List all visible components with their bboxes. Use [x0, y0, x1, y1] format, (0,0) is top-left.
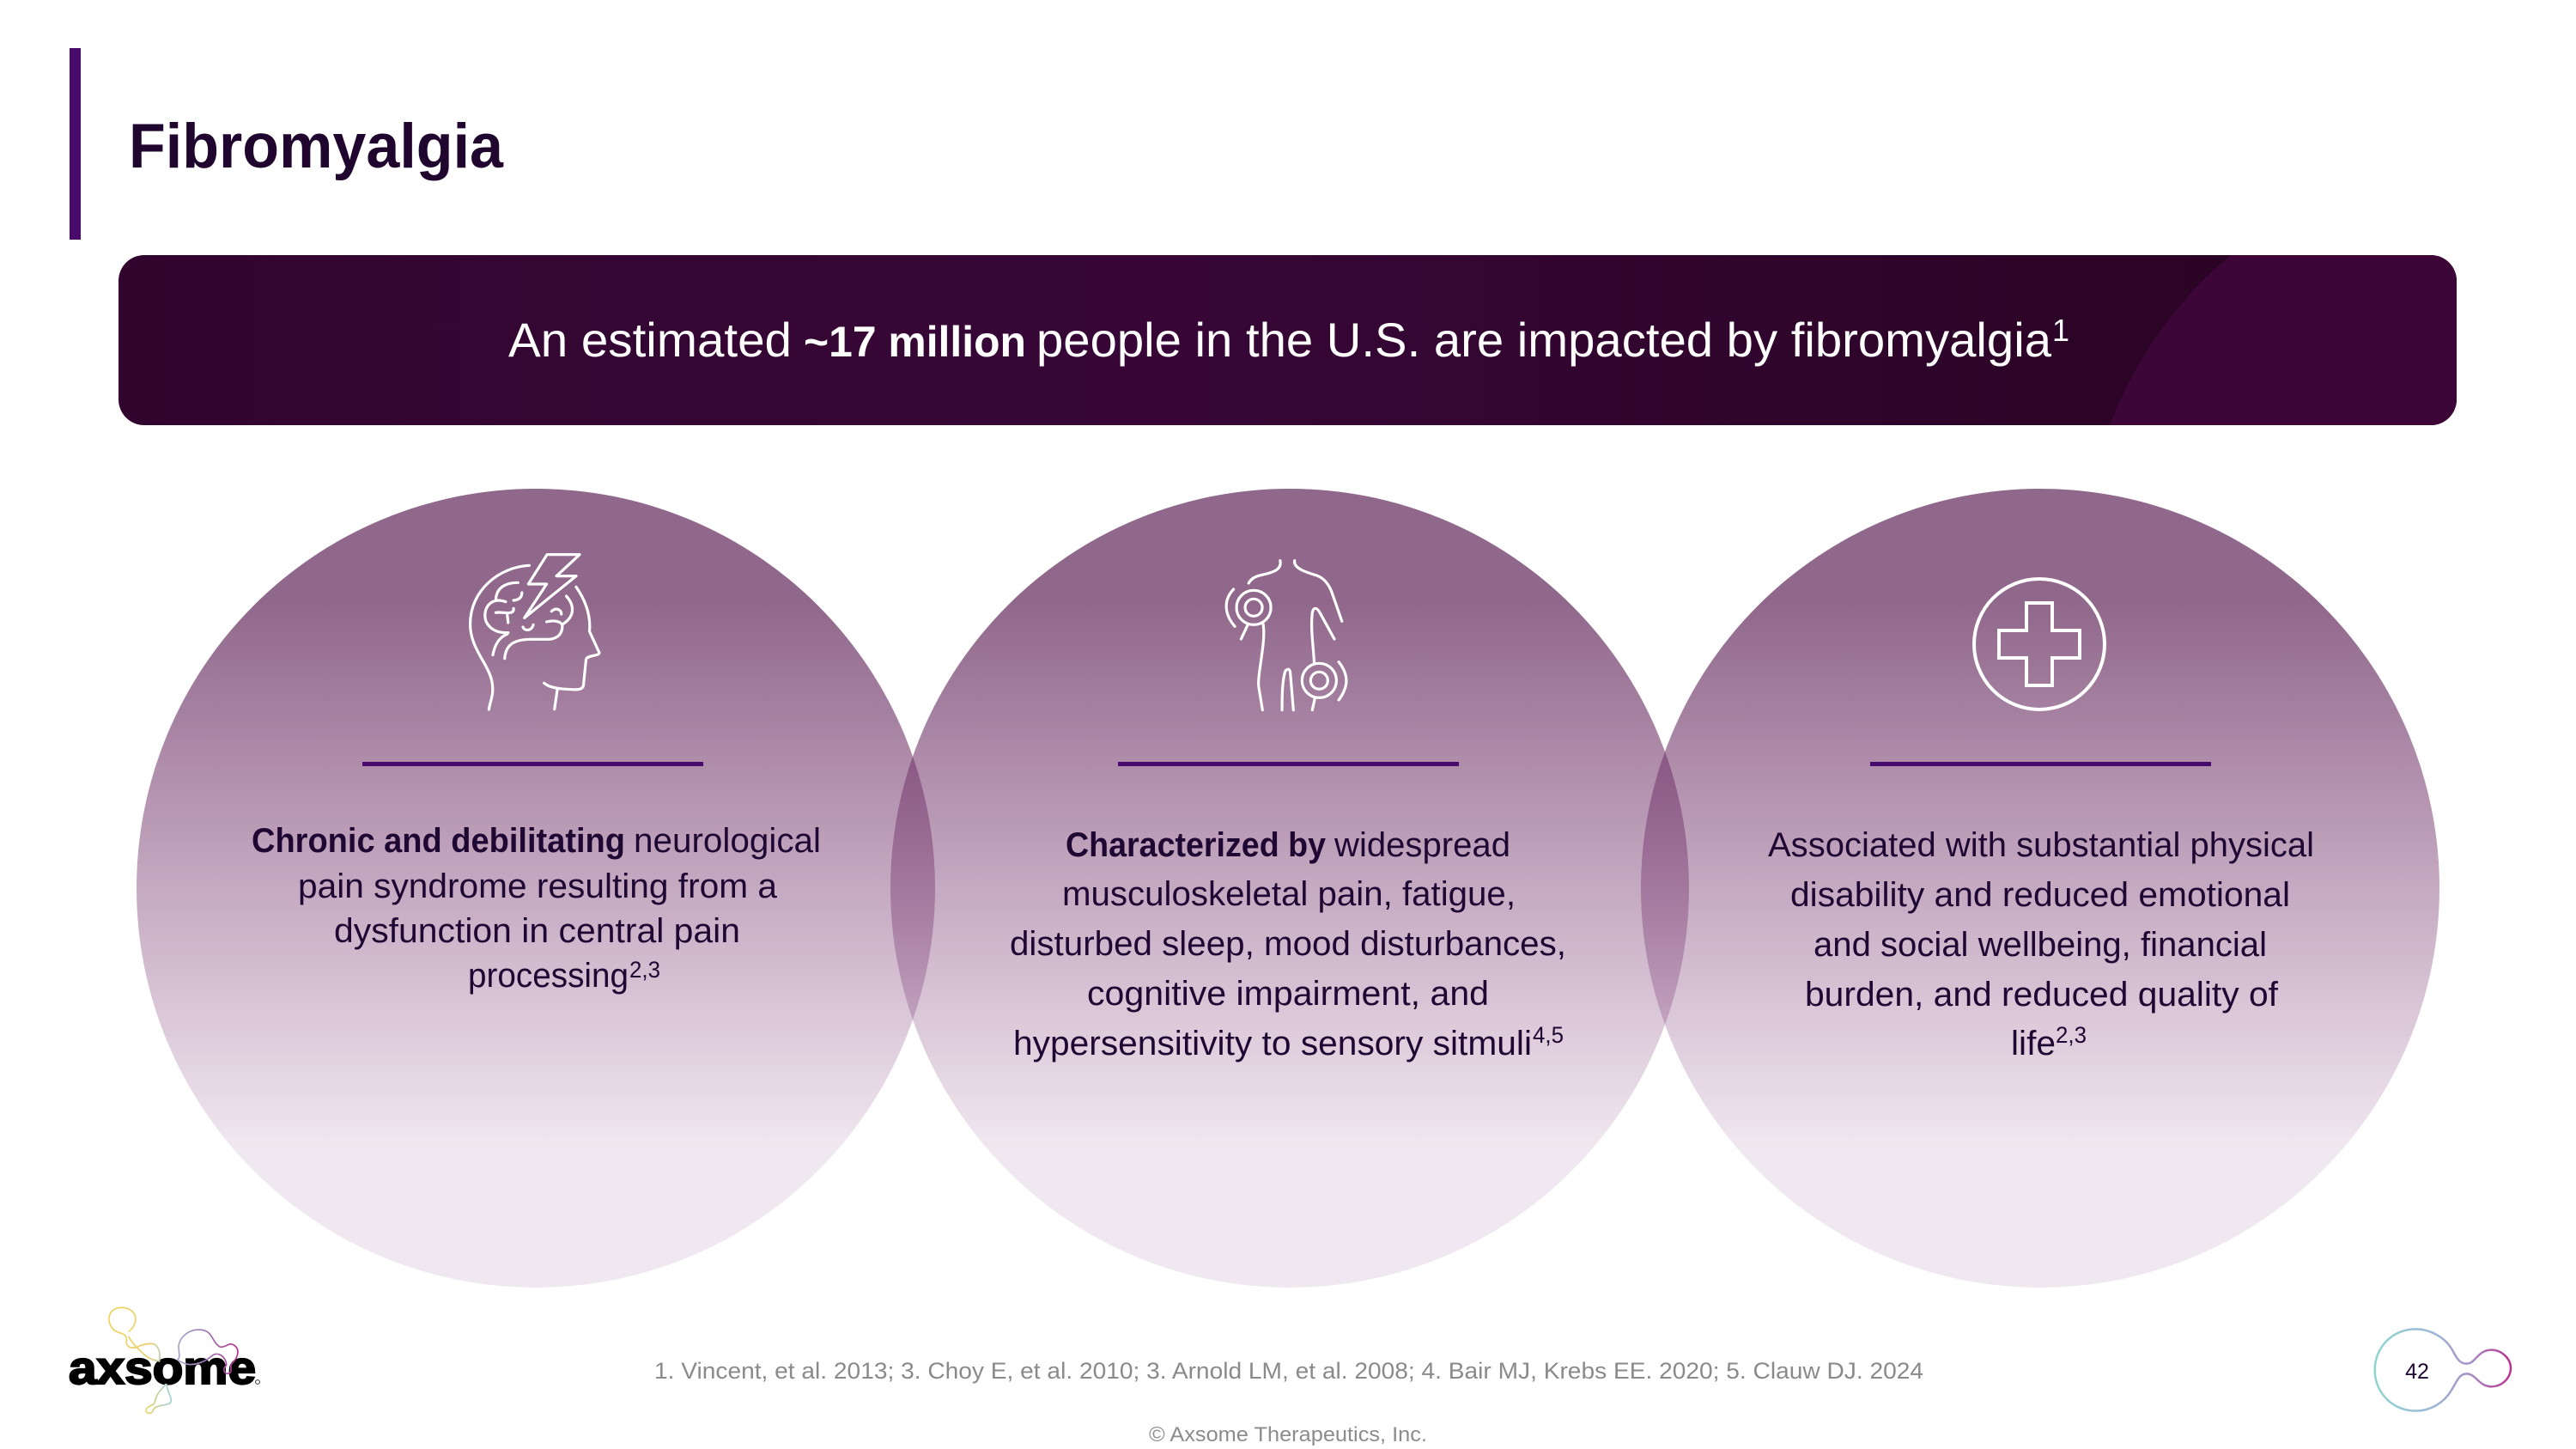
text block: characterized by: hypersensitivity to sensory sitmuli: [1013, 1025, 1532, 1062]
banner: 17 million people: 1: [2052, 313, 2069, 348]
page number badge: [2375, 1329, 2511, 1411]
text block: characterized by: musculoskeletal pain, fatigue,: [1062, 875, 1516, 913]
text block: associated with: [1768, 826, 2314, 1062]
text block: chronic and debilitating: pain syndrome resulting from a: [298, 868, 778, 905]
text block: associated with: and social wellbeing, financial: [1814, 926, 2267, 964]
page number badge: 42: [2405, 1360, 2429, 1384]
copyright: © Axsome Therapeutics, Inc.: [1149, 1423, 1427, 1446]
text block: associated with: 2,3: [2056, 1022, 2087, 1048]
logo: axsome: axsome: [69, 1342, 256, 1394]
text block: characterized by: widespread: [1334, 826, 1510, 864]
panel: disability circle: [1641, 489, 2439, 1288]
text block: characterized by: cognitive impairment, and: [1087, 975, 1489, 1013]
text block: associated with: burden, and reduced quality of: [1805, 976, 2279, 1014]
divider: [1870, 762, 2211, 766]
text block: chronic and debilitating: neurological: [634, 822, 821, 860]
panel: widespread pain circle: [890, 489, 1689, 1288]
text block: characterized by: disturbed sleep, mood disturbances,: [1010, 925, 1566, 963]
icon: medical cross in circle: [1974, 579, 2105, 709]
text block: characterized by: Characterized by: [1066, 826, 1327, 864]
title: Fibromyalgia: [129, 112, 504, 181]
text block: chronic and debilitating: 2,3: [629, 957, 660, 983]
icon: head with brain and lightning bolt: [471, 555, 599, 709]
text block: chronic and debilitating: processing: [468, 957, 629, 995]
logo: axsome: [69, 1307, 259, 1413]
text block: characterized by: [1010, 826, 1566, 1062]
panel: neurological pain circle: [137, 489, 935, 1288]
text block: chronic and debilitating: dysfunction in central pain: [334, 912, 740, 950]
text block: associated with: Associated with substantial physical: [1768, 826, 2314, 864]
footnote references: 1. Vincent, et al. 2013; 3. Choy E, et al. 2010; 3. Arnold LM, et al. 2008; 4. Bair MJ, Krebs EE. 2020; 5. Clauw DJ. 2024: [654, 1358, 1923, 1384]
divider: [362, 762, 703, 766]
text block: associated with: life: [2011, 1025, 2056, 1062]
banner: 17 million people: ~17 million: [804, 318, 1026, 366]
divider: [1118, 762, 1459, 766]
text block: chronic and debilitating: [252, 822, 821, 995]
text block: associated with: disability and reduced emotional: [1790, 876, 2290, 914]
banner: 17 million people: An estimated: [508, 313, 792, 367]
text block: characterized by: 4,5: [1533, 1022, 1564, 1048]
title accent bar: [70, 48, 81, 240]
banner: 17 million people: [118, 255, 2464, 425]
banner: 17 million people: people in the U.S. are impacted by fibromyalgia: [1036, 313, 2052, 367]
icon: torso with pain targets: [1226, 561, 1346, 710]
text block: chronic and debilitating: Chronic and debilitating: [252, 822, 625, 860]
